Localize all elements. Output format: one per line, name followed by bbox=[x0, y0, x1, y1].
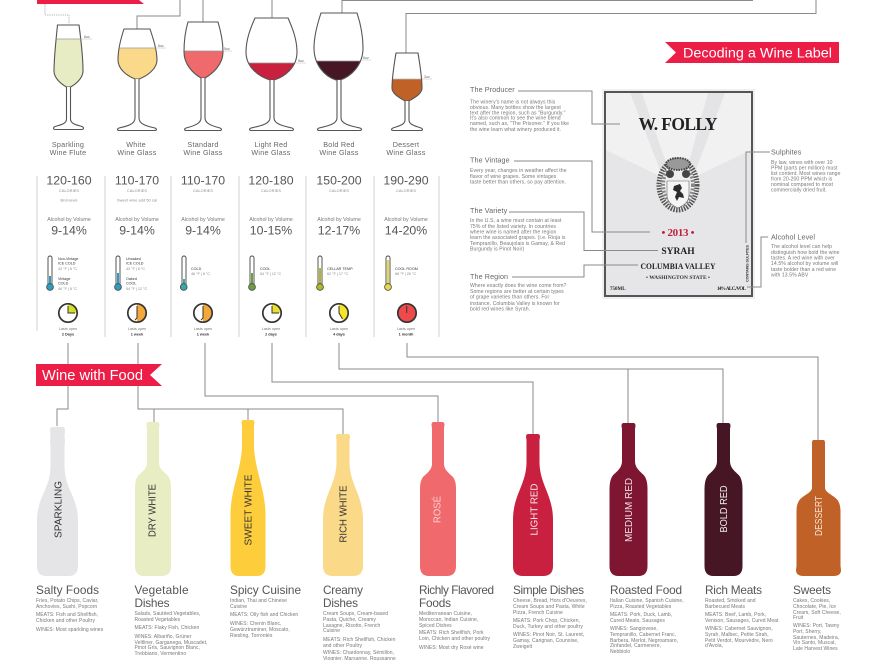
glass: sparkling flute: 6oz bbox=[84, 35, 90, 39]
stats: standard: CALORIES bbox=[193, 189, 213, 193]
glass: standard: Standard bbox=[187, 140, 219, 149]
label: contains sulfites: CONTAINS SULFITES bbox=[746, 245, 750, 282]
stats: dessert: COOL ROOM bbox=[395, 267, 418, 271]
annotation: sulphites: Sulphites bbox=[771, 148, 802, 156]
food: richly flavored foods: WINES: Most dry Rosé wine bbox=[419, 645, 484, 651]
stats: dessert: Alcohol by Volume bbox=[384, 217, 428, 223]
food: roasted food: Pizza, Roasted Vegetables bbox=[610, 604, 672, 610]
stats: standard bbox=[180, 174, 225, 336]
food: rich meats: Barbecued Meats bbox=[705, 604, 746, 610]
bottle: dry white bbox=[135, 422, 171, 576]
stats: dessert: 1 month bbox=[399, 332, 414, 336]
label: state: • WASHINGTON STATE • bbox=[646, 276, 710, 281]
annotation: the region: Some regions are better at certain types bbox=[470, 289, 564, 295]
stats: white: Sweet wine add 50 cal bbox=[117, 198, 157, 202]
food: richly flavored foods: Mediterranean Cuisine, bbox=[419, 611, 472, 617]
stats: bold red: Lasts open bbox=[330, 327, 348, 331]
stats: white: COOL bbox=[126, 282, 136, 286]
food: vegetable dishes: MEATS: Flaky Fish, Chicken bbox=[134, 625, 199, 631]
food: sweets: Cakes, Cookies, bbox=[793, 598, 830, 604]
food: salty foods: Anchovies, Sushi, Popcorn bbox=[36, 604, 97, 610]
stats: light red: 120-180 bbox=[248, 174, 294, 188]
food: vegetable dishes: Pinot Gris, Sauvignon Blanc, bbox=[134, 645, 200, 651]
glass: sparkling flute: Sparkling bbox=[52, 140, 84, 149]
annotation: the producer: It's also common to see the wine blend bbox=[470, 116, 561, 122]
food: sweets: Sauternes, Madeira, bbox=[793, 635, 839, 641]
stats: standard: 1 week bbox=[197, 332, 210, 336]
stats: white: 43 °F | 6 °C bbox=[126, 267, 145, 271]
food: roasted food bbox=[610, 583, 684, 655]
annotation connector lines bbox=[509, 91, 770, 287]
annotation: the variety: In the U.S, a wine must contain at least bbox=[470, 218, 562, 224]
stats: dessert: 68 °F | 20 °C bbox=[395, 272, 416, 276]
annotation: the vintage: taste better than others, so pay attention. bbox=[470, 180, 566, 186]
food: creamy dishes: Cream Soups, Cream-based bbox=[323, 611, 388, 617]
food: richly flavored foods: Spiced Dishes bbox=[419, 623, 452, 629]
glass: bold red: Wine Glass bbox=[319, 148, 359, 157]
heading ribbon: Wine with Food bbox=[36, 364, 162, 386]
bottle: light red: LIGHT RED bbox=[528, 483, 540, 536]
annotation: the variety: Burgundy is Pinot Noir) bbox=[470, 246, 524, 252]
food: spicy cuisine bbox=[230, 583, 301, 639]
stats: sparkling: 2 Days bbox=[62, 332, 74, 336]
heading ribbon: Decoding a Wine Label: Decoding a Wine Label bbox=[683, 46, 832, 60]
food: roasted food: Roasted Food bbox=[610, 583, 682, 597]
icon: crest bbox=[659, 158, 697, 210]
food: sweets: Cream, Soft Cheese, bbox=[793, 610, 841, 616]
glass: white wine bbox=[117, 29, 166, 157]
food: rich meats: Venison, Sausages, Cured Meat bbox=[705, 618, 779, 624]
food: rich meats: Petit Verdot, Mourvèdre, Nero bbox=[705, 638, 773, 644]
bottle: sparkling bbox=[37, 427, 78, 576]
annotation: alcohol level: Alcohol Level bbox=[771, 232, 815, 242]
stats: sparkling: ICE COLD bbox=[58, 262, 76, 266]
food: roasted food: Barbera, Merlot, Negroamaro, bbox=[610, 638, 678, 644]
stats: white: CALORIES bbox=[127, 189, 147, 193]
annotation: the variety: learn the associated grapes. (i.e. Rioja is bbox=[470, 235, 566, 241]
stats: sparkling: 120-160 bbox=[46, 174, 92, 188]
stats: light red bbox=[248, 174, 294, 336]
bottle: rich white: RICH WHITE bbox=[338, 486, 350, 542]
food: rich meats: WINES: Cabernet Sauvignon, bbox=[705, 626, 773, 632]
bottle: dessert bbox=[796, 440, 841, 576]
food: simple dishes: MEATS: Pork Chop, Chicken, bbox=[513, 618, 580, 624]
heading ribbon: Wine with Food: Wine with Food bbox=[42, 368, 143, 384]
bottle: rose bbox=[420, 422, 456, 576]
bottle: dry white: DRY WHITE bbox=[146, 484, 158, 537]
glass: dessert: Dessert bbox=[393, 140, 419, 149]
annotation: sulphites: commercially dried fruit. bbox=[771, 188, 827, 194]
food: rich meats: Rich Meats bbox=[705, 583, 762, 597]
glass: white wine: Wine Glass bbox=[117, 148, 157, 157]
food: vegetable dishes: Roasted Vegetables bbox=[134, 617, 181, 623]
bottle: bold red bbox=[704, 423, 742, 576]
food: creamy dishes: Dishes bbox=[323, 596, 358, 610]
annotation: the producer: text after the region, such as "Burgundy." bbox=[470, 110, 566, 116]
food: roasted food: Italian Cuisine, Spanish Cuisine, bbox=[610, 598, 684, 604]
stats: bold red: CELLAR TEMP. bbox=[327, 267, 353, 271]
food: vegetable dishes bbox=[134, 583, 208, 657]
food: creamy dishes: Pasta, Quiche, Creamy bbox=[323, 617, 376, 623]
food: simple dishes: Cheese, Bread, Hors d'Oeuvres, bbox=[513, 598, 587, 604]
stats: white: Oaked bbox=[126, 277, 137, 281]
stats: sparkling: 46 °F | 8 °C bbox=[58, 287, 77, 291]
food: sweets: WINES: Port, Tawny bbox=[793, 623, 840, 629]
food: richly flavored foods: Richly Flavored bbox=[419, 583, 494, 597]
stats: dessert: 190-290 bbox=[383, 174, 429, 188]
annotation: sulphites: By law, wines with over 10 bbox=[771, 160, 833, 166]
food: creamy dishes: MEATS: Rich Shellfish, Chicken bbox=[323, 637, 396, 643]
stats: sparkling bbox=[46, 174, 92, 336]
glass: sparkling flute bbox=[50, 25, 92, 157]
annotation: alcohol level: The alcohol level can help bbox=[771, 244, 832, 250]
food: spicy cuisine: Gewürztraminer, Moscato, bbox=[230, 627, 290, 633]
stats: standard: Alcohol by Volume bbox=[181, 217, 225, 223]
stats: white: Lasts open bbox=[128, 327, 146, 331]
annotation: the vintage: flavor of wine grapes. Some vintages bbox=[470, 174, 557, 180]
stats: standard: COLD bbox=[191, 267, 202, 271]
stats: light red: 54 °F | 12 °C bbox=[260, 272, 281, 276]
annotation: the vintage bbox=[470, 156, 567, 186]
food: vegetable dishes: Salads, Sautéed Vegetables, bbox=[134, 611, 200, 617]
annotation: the producer: The Producer bbox=[470, 85, 515, 94]
food: simple dishes bbox=[513, 583, 587, 650]
stats: dessert: 14-20% bbox=[385, 224, 427, 238]
annotation: sulphites bbox=[771, 148, 841, 194]
ribbon: top banner fragment bbox=[37, 0, 144, 4]
stats: white: 110-170 bbox=[115, 174, 159, 188]
stats: sparkling: CALORIES bbox=[59, 189, 79, 193]
stats: dessert: CALORIES bbox=[396, 189, 416, 193]
bottle: dessert: DESSERT bbox=[813, 496, 825, 536]
stats: light red: Lasts open bbox=[262, 327, 280, 331]
food: roasted food: WINES: Sangiovese, bbox=[610, 626, 658, 632]
food: roasted food: MEATS: Pork, Duck, Lamb, bbox=[610, 612, 672, 618]
label: alcohol content: 14% ALC./VOL bbox=[717, 287, 747, 292]
annotation: alcohol level: 14.5% alcohol by volume will bbox=[771, 261, 838, 267]
stats: light red: 10-15% bbox=[250, 224, 292, 238]
annotation: the vintage: The Vintage bbox=[470, 156, 510, 164]
annotation: alcohol level: tastes. A red wine with over bbox=[771, 256, 835, 262]
stats: sparkling: Lasts open bbox=[59, 327, 77, 331]
food: creamy dishes bbox=[323, 583, 396, 660]
stats: sparkling: Vintage bbox=[58, 277, 70, 281]
food: vegetable dishes: Dishes bbox=[134, 596, 170, 610]
food: spicy cuisine: Indian, Thai and Chinese bbox=[230, 598, 287, 604]
stats: white: 54 °F | 12 °C bbox=[126, 287, 147, 291]
annotation: sulphites: PPM (parts per million) must bbox=[771, 166, 838, 172]
annotation: alcohol level: distinguish how bold the wine bbox=[771, 250, 840, 256]
bottle: medium red: MEDIUM RED bbox=[623, 478, 635, 542]
stats: standard: 9-14% bbox=[185, 224, 221, 238]
stats: light red: 2 days bbox=[265, 332, 277, 336]
stats: bold red: Alcohol by Volume bbox=[317, 217, 361, 223]
stats: sparkling: Brut-level bbox=[60, 198, 78, 202]
stats: white bbox=[115, 174, 159, 336]
stats: sparkling: Alcohol by Volume bbox=[47, 217, 91, 223]
label: region: COLUMBIA VALLEY bbox=[640, 261, 716, 271]
stats: white: 1 week bbox=[131, 332, 144, 336]
food: rich meats: Roasted, Smoked and bbox=[705, 598, 756, 604]
food: simple dishes: WINES: Pinot Noir, St. Laurent, bbox=[513, 632, 584, 638]
food: sweets: Vin Santo, Muscat, bbox=[793, 640, 836, 646]
food: spicy cuisine: Riesling, Torrontés bbox=[230, 633, 273, 639]
food: simple dishes: Cream Soups and Pasta, White bbox=[513, 604, 585, 610]
annotation: the producer: obvious. Many bottles show the largest bbox=[470, 105, 561, 111]
stats: dessert: Lasts open bbox=[397, 327, 415, 331]
bottle: sweet white: SWEET WHITE bbox=[242, 474, 254, 546]
food: richly flavored foods: Loin, Chicken and other poultry bbox=[419, 636, 491, 642]
label: vintage: • 2013 • bbox=[662, 227, 695, 239]
glass: white wine: 6oz bbox=[158, 44, 164, 48]
annotation: alcohol level: taste bolder than a red wine bbox=[771, 267, 836, 273]
food: roasted food: Tempranillo, Cabernet Franc, bbox=[610, 632, 676, 638]
food: creamy dishes: Cuisine bbox=[323, 628, 340, 634]
annotation: the variety: 75% of the listed variety. In countries bbox=[470, 224, 556, 230]
food: sweets: Fruit bbox=[793, 615, 804, 621]
food: sweets: Sweets bbox=[793, 583, 831, 597]
annotation: the variety: where wine is named after the region bbox=[470, 230, 556, 236]
glass: dessert bbox=[386, 53, 432, 157]
stats: dessert bbox=[383, 174, 429, 336]
glass: light red: Wine Glass bbox=[251, 148, 291, 157]
food: roasted food: Nebbiolo bbox=[610, 649, 630, 655]
label: variety: SYRAH bbox=[661, 247, 695, 257]
food: creamy dishes: Creamy bbox=[323, 583, 363, 597]
stats: standard: Lasts open bbox=[194, 327, 212, 331]
annotation: sulphites: nominal compared to most bbox=[771, 182, 833, 188]
food: richly flavored foods: Foods bbox=[419, 596, 451, 610]
food: creamy dishes: and other Poultry bbox=[323, 643, 363, 649]
bottle: light red bbox=[513, 434, 553, 576]
food: vegetable dishes: Veltliner, Garganega, Muscadet, bbox=[134, 640, 208, 646]
annotation: the region bbox=[470, 272, 567, 312]
food: salty foods: Fries, Potato Chips, Caviar, bbox=[36, 598, 99, 604]
annotation: the vintage: Every year, changes in weather affect the bbox=[470, 168, 567, 174]
label: volume: 750ML bbox=[610, 287, 626, 292]
bottle: rich white bbox=[323, 434, 363, 576]
stats: white: Unoaked bbox=[126, 257, 141, 261]
stats: sparkling: 43 °F | 6 °C bbox=[58, 267, 77, 271]
food: simple dishes: Pizza, French Cuisine bbox=[513, 610, 563, 616]
label: producer name: W. FOLLY bbox=[638, 114, 718, 134]
glass: standard: 5oz bbox=[224, 47, 230, 51]
food: creamy dishes: WINES: Chardonnay, Sémillon, bbox=[323, 650, 394, 656]
annotation: the region: bold red wines like Syrah. bbox=[470, 306, 530, 312]
glass: light red: Light Red bbox=[254, 140, 288, 149]
bottle: medium red bbox=[610, 423, 648, 576]
annotation: the producer: The winery's name is not always this bbox=[470, 100, 556, 106]
stats: light red: CALORIES bbox=[261, 189, 281, 193]
stats: white: Alcohol by Volume bbox=[115, 217, 159, 223]
glass: light red: 5oz bbox=[298, 59, 304, 63]
food: simple dishes: Gamay, Carignan, Counoise, bbox=[513, 638, 579, 644]
wine label panel bbox=[602, 89, 755, 299]
food: richly flavored foods: Moroccan, Indian Cuisine, bbox=[419, 617, 478, 623]
annotation: alcohol level bbox=[771, 232, 840, 278]
bottle: rose: ROSÉ bbox=[430, 496, 444, 523]
annotation: the variety: The Variety bbox=[470, 206, 508, 215]
annotation: the region: The Region bbox=[470, 272, 508, 281]
glass: white wine: White bbox=[126, 140, 146, 149]
stats: bold red: 62 °F | 17 °C bbox=[327, 272, 348, 276]
stats: sparkling: 9-14% bbox=[51, 224, 87, 238]
annotation: sulphites: list content. Most wines range bbox=[771, 171, 841, 177]
food: sweets: Port, Sherry, bbox=[793, 629, 821, 635]
glass: bold red: Bold Red bbox=[323, 140, 355, 149]
glass: light red bbox=[246, 18, 306, 157]
glass: standard: Wine Glass bbox=[183, 148, 223, 157]
stats: light red: COOL bbox=[260, 267, 270, 271]
food: salty foods: Salty Foods bbox=[36, 583, 99, 597]
food: rich meats: MEATS: Beef, Lamb, Pork, bbox=[705, 612, 766, 618]
food: simple dishes: Zweigelt bbox=[513, 644, 533, 650]
heading ribbon: Decoding a Wine Label bbox=[665, 42, 839, 63]
food: rich meats: Syrah, Malbec, Petite Sirah, bbox=[705, 632, 769, 638]
food: sweets bbox=[793, 583, 841, 652]
annotation: sulphites: from 20-200 PPM which is bbox=[771, 176, 833, 182]
stat column dividers bbox=[37, 176, 439, 337]
food: richly flavored foods: MEATS: Rich Shellfish, Pork bbox=[419, 630, 484, 636]
food: vegetable dishes: WINES: Albariño, Grüner bbox=[134, 634, 192, 640]
food: rich meats bbox=[705, 583, 779, 649]
annotation: the producer: named, such as, "The Prisoner." If you like bbox=[470, 121, 569, 127]
annotation: the region: Where exactly does the wine come from? bbox=[470, 283, 567, 289]
food: roasted food: Zinfandel, Carmenere, bbox=[610, 643, 661, 649]
bottle: sparkling: SPARKLING bbox=[52, 481, 64, 538]
annotation: the region: instance, Columbia Valley is known for bbox=[470, 301, 560, 307]
stats: standard: 110-170 bbox=[181, 174, 225, 188]
food: spicy cuisine: Spicy Cuisine bbox=[230, 583, 301, 597]
food: rich meats: d'Avola, bbox=[705, 643, 723, 649]
food: simple dishes: Duck, Turkey and other poultry bbox=[513, 624, 583, 630]
connector lines: top to glasses bbox=[45, 0, 816, 53]
stats: bold red: 12-17% bbox=[318, 224, 360, 238]
food: spicy cuisine: Cuisine bbox=[230, 604, 247, 610]
glass: bold red bbox=[314, 13, 371, 157]
food: sweets: Late Harvest Wines bbox=[793, 646, 838, 652]
food: roasted food: Cured Meats, Sausages bbox=[610, 618, 665, 624]
stats: bold red: 4 days bbox=[333, 332, 345, 336]
annotation: the producer: the wine learn what winery produced it. bbox=[470, 127, 561, 133]
food: salty foods: WINES: Most sparkling wines bbox=[36, 627, 104, 633]
glass: dessert: Wine Glass bbox=[386, 148, 426, 157]
food: sweets: Chocolate, Pie, Ice bbox=[793, 604, 836, 610]
food: salty foods bbox=[36, 583, 104, 633]
food: salty foods: MEATS: Fish and Shellfish, bbox=[36, 612, 98, 618]
stats: bold red bbox=[316, 174, 362, 336]
food: vegetable dishes: Trebbiano, Vermentino bbox=[134, 651, 186, 657]
stats: standard: 46 °F | 8 °C bbox=[191, 272, 210, 276]
stats: white: ICE COLD bbox=[126, 262, 144, 266]
glass: standard bbox=[183, 22, 232, 157]
food: creamy dishes: Lasagne, Risotto, French bbox=[323, 623, 380, 629]
food: simple dishes: Simple Dishes bbox=[513, 583, 584, 597]
glass: dessert: 3oz bbox=[424, 75, 430, 79]
food: spicy cuisine: WINES: Chenin Blanc, bbox=[230, 621, 282, 627]
food: salty foods: Chicken and other Poultry bbox=[36, 618, 95, 624]
connector lines: glasses to bottles bbox=[57, 343, 818, 440]
glass: bold red: 6oz bbox=[363, 56, 369, 60]
food: vegetable dishes: Vegetable bbox=[134, 583, 189, 597]
annotation: alcohol level: with 13.5% ABV bbox=[771, 272, 809, 278]
bottle: bold red: BOLD RED bbox=[718, 485, 730, 532]
glass: sparkling flute: Wine Flute bbox=[50, 148, 86, 157]
stats: sparkling: COLD bbox=[58, 282, 69, 286]
annotation: the variety bbox=[470, 206, 566, 252]
stats: bold red: 150-200 bbox=[316, 174, 362, 188]
stats: light red: Alcohol by Volume bbox=[249, 217, 293, 223]
stats: bold red: CALORIES bbox=[329, 189, 349, 193]
annotation: the region: of grape varieties than others. For bbox=[470, 294, 549, 300]
annotation: the producer bbox=[470, 85, 569, 133]
food: richly flavored foods bbox=[419, 583, 494, 651]
annotation: the variety: Tempranillo, Beaujolais is Gamay, & Red bbox=[470, 241, 565, 247]
food: spicy cuisine: MEATS: Oily fish and Chicken bbox=[230, 612, 298, 618]
bottle: sweet white bbox=[230, 420, 266, 576]
stats: white: 9-14% bbox=[119, 224, 155, 238]
stats: sparkling: Non-Vintage bbox=[58, 257, 78, 261]
